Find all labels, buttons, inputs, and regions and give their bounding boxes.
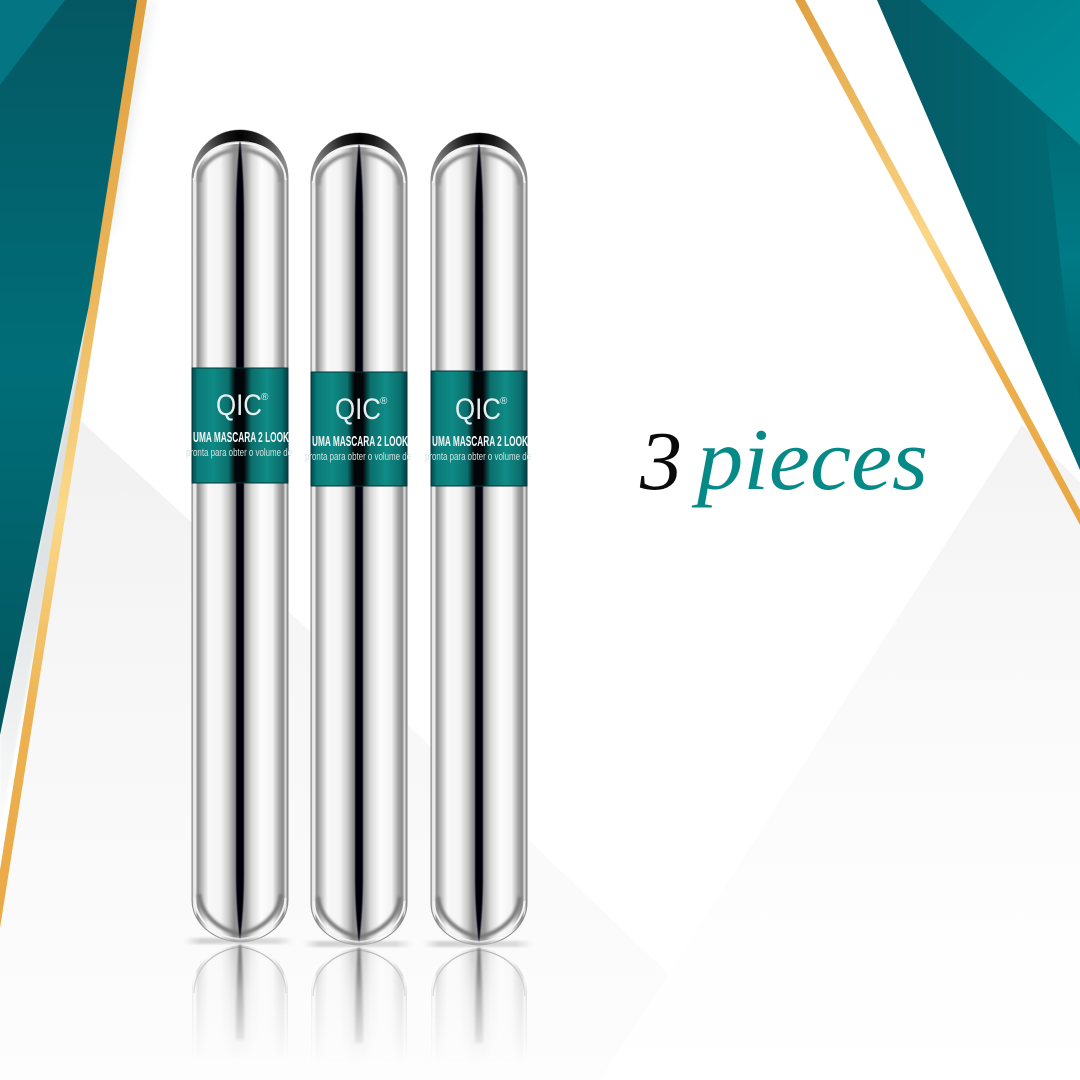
product tagline: pronta para obter o volume de	[305, 451, 411, 463]
tube body	[311, 133, 407, 945]
right light facet	[920, 0, 1080, 145]
tube 2 ground shadow	[303, 941, 413, 947]
mascara tube 1	[186, 130, 292, 942]
label band	[186, 368, 292, 483]
mascara tube 3	[425, 133, 531, 945]
right mid facet	[1045, 118, 1080, 400]
left gold line	[0, 0, 147, 928]
background: left grey facet	[0, 420, 780, 1080]
brand: QIC	[335, 393, 381, 426]
right teal panel	[877, 0, 1080, 470]
tube 1 reflection	[192, 944, 288, 1042]
product name: UMA MASCARA 2 LOOK	[193, 429, 289, 446]
label band: ®	[500, 396, 508, 407]
tube 3 ground shadow	[423, 941, 533, 947]
heading: 3 pieces: 3	[639, 415, 682, 508]
mascara tube 2	[305, 133, 411, 945]
label band: ®	[380, 396, 388, 407]
tube 3 reflection	[431, 946, 527, 1044]
label band	[425, 371, 531, 486]
tube 2 reflection	[311, 946, 407, 1044]
right gold line	[795, 0, 1080, 525]
brand: QIC	[216, 389, 262, 422]
label band	[305, 372, 411, 486]
left light facet	[0, 0, 65, 85]
label band: ®	[261, 392, 269, 403]
product tagline: pronta para obter o volume de	[186, 447, 292, 459]
background: right grey facet	[600, 425, 1080, 1080]
tube body	[192, 130, 288, 942]
brand: QIC	[455, 393, 501, 426]
tube 1 ground shadow	[184, 938, 294, 944]
left corner decoration	[0, 0, 154, 928]
left teal panel	[0, 0, 138, 735]
product tagline: pronta para obter o volume de	[425, 451, 531, 463]
product name: UMA MASCARA 2 LOOK	[312, 433, 408, 450]
right corner decoration	[795, 0, 1080, 525]
tube body	[431, 133, 527, 945]
product name: UMA MASCARA 2 LOOK	[432, 433, 528, 450]
heading: 3 pieces: pieces	[691, 412, 928, 509]
shadow beside gold line	[0, 262, 98, 830]
